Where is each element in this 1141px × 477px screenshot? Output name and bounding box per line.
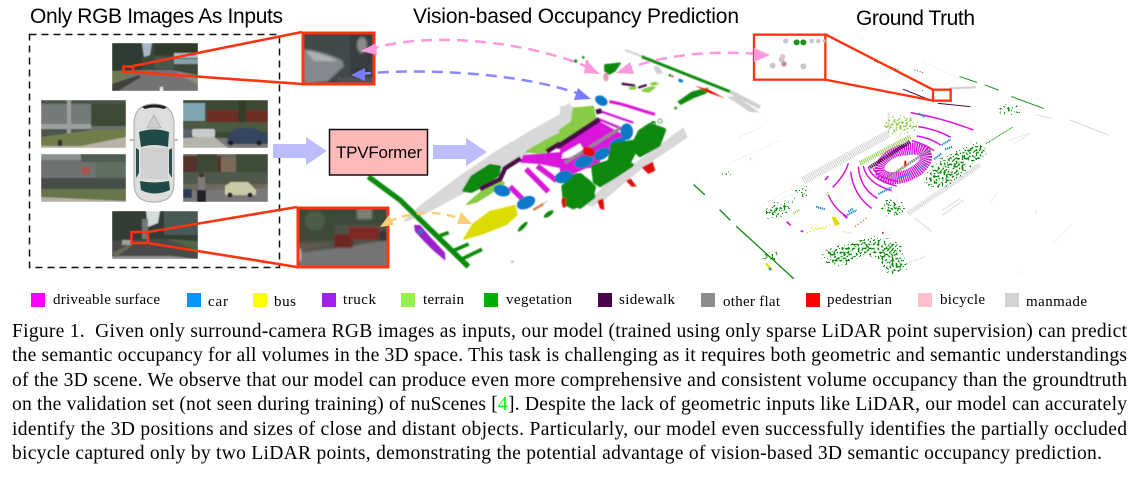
legend: pedestrian: pedestrian (827, 292, 892, 308)
legend: truck (322, 292, 376, 308)
legend: bus: bus (274, 294, 296, 310)
chart: ground truth LiDAR scene (694, 34, 1108, 279)
truck (414, 225, 445, 261)
cars far (553, 93, 633, 185)
vegetation near (517, 175, 594, 233)
caption (12, 321, 1128, 464)
bus (464, 206, 517, 239)
driveable surface far (560, 102, 655, 174)
legend: bus (253, 293, 296, 310)
caption: the semantic occupancy for all volumes in the 3D space. This task is challenging as it requires both geometric and semantic understandings (12, 345, 1127, 366)
other flat points (888, 148, 932, 177)
pedestrian and misc points (769, 161, 906, 270)
vegetation far blocks (565, 121, 664, 207)
outer ground truth points (694, 34, 1108, 278)
legend: car: car (208, 294, 228, 310)
legend: vegetation: vegetation (506, 292, 572, 308)
zoom connector top (124, 32, 302, 84)
vegetation left (463, 165, 500, 192)
car points (816, 113, 953, 215)
legend: driveable surface: driveable surface (53, 292, 160, 308)
legend: bicycle (918, 292, 985, 308)
arrow: TPVFormer to prediction (433, 138, 487, 166)
caption: identify the 3D positions and sizes of close and distant objects. Particularly, our model even successfully identifies the partially occluded (12, 419, 1127, 440)
driveable surface points (787, 113, 973, 232)
caption: bicycle captured only by two LiDAR points, demonstrating the potential advantage of vision-based 3D semantic occupancy prediction. (12, 443, 1102, 464)
cars near (418, 152, 596, 234)
caption: Figure 1. Given only surround-camera RGB images as inputs, our model (trained using only sparse LiDAR point supervision) can predict (12, 321, 1128, 342)
camera image: rear (112, 211, 198, 259)
terrain near (467, 107, 597, 204)
arrow: pink left pair (361, 40, 600, 74)
arrow: blue pair (351, 68, 591, 100)
dashed input frame (30, 34, 280, 268)
arrow: orange pair (380, 212, 472, 227)
legend: other flat (701, 293, 781, 310)
sidewalk near (480, 143, 560, 189)
camera image: front left (41, 100, 126, 148)
central ground truth points (760, 112, 980, 270)
green barrier near (368, 177, 482, 267)
zoom frame top (303, 33, 374, 84)
other flat far (565, 128, 620, 163)
zoom inset (754, 35, 826, 80)
other flat near (565, 142, 600, 162)
arrow: pink right pair (616, 53, 760, 74)
panel: camera inputs (30, 34, 280, 268)
far terrain (628, 82, 659, 93)
heading: Vision-based Occupancy Prediction: Vision-based Occupancy Prediction (413, 5, 739, 28)
zoom connector bottom (132, 207, 297, 267)
left manmade wall (405, 104, 574, 221)
debris (511, 260, 514, 263)
far sidewalk and box (825, 34, 970, 107)
caption: of the 3D scene. We observe that our model can produce even more comprehensive and consistent volume occupancy than the groundtruth (12, 370, 1127, 391)
camera image: front (112, 43, 198, 91)
manmade points (760, 112, 980, 263)
hole far (562, 143, 584, 159)
callout: rear camera zoom (132, 207, 388, 267)
far sidewalk (622, 84, 647, 88)
terrain points (793, 137, 911, 213)
sidewalk far (557, 111, 602, 147)
near half of prediction (368, 104, 600, 267)
zoomed crop: bus on road (300, 210, 386, 266)
terrain point cluster (877, 112, 923, 138)
sidewalk points (870, 142, 910, 167)
pedestrian bollard (561, 197, 566, 208)
block: TPVFormer: TPVFormer (336, 143, 422, 162)
arrow: pink tip over ground truth inset (754, 48, 770, 62)
pedestrians far (562, 162, 655, 210)
icon: ego car top view (130, 104, 178, 202)
far wall stub (560, 105, 572, 130)
block: TPVFormer (330, 130, 428, 175)
chart: predicted occupancy 3D scene (368, 50, 760, 267)
zoomed crop: passing car (304, 34, 372, 82)
legend: terrain (401, 292, 464, 308)
far blue car (678, 78, 684, 83)
legend: bicycle: bicycle (940, 292, 985, 308)
legend (31, 292, 1087, 310)
legend: other flat: other flat (723, 294, 781, 310)
pedestrian centre (581, 145, 596, 158)
far green barrier (642, 57, 730, 92)
vegetation point clusters (713, 69, 1028, 279)
hole in driveable points (882, 152, 911, 174)
camera image: rear left (41, 154, 126, 202)
far vegetation (574, 56, 708, 109)
arrow: images to TPVFormer (273, 137, 327, 165)
legend: sidewalk: sidewalk (619, 292, 676, 308)
camera image: front right (183, 100, 268, 148)
heading: Ground Truth: Ground Truth (856, 7, 975, 30)
legend: manmade: manmade (1026, 294, 1087, 310)
outer manmade points (730, 62, 1108, 273)
bus points (766, 217, 840, 270)
far half of prediction (553, 50, 760, 210)
legend: terrain: terrain (423, 292, 464, 308)
far terrain block (560, 107, 595, 141)
right manmade wall (587, 128, 687, 206)
pedestrian near (581, 145, 596, 158)
caption: on the validation set (not seen during training) of nuScenes [4]. Despite the lack of geometric inputs like LiDAR, our model can accurately (12, 394, 1127, 415)
legend: manmade (1005, 293, 1087, 310)
cone tip (543, 201, 547, 204)
holes (563, 143, 583, 157)
zoom frame bottom (298, 208, 388, 267)
cone (533, 204, 543, 210)
heading: Only RGB Images As Inputs: Only RGB Images As Inputs (30, 5, 283, 28)
far reds (586, 61, 725, 98)
far manmade strip (625, 50, 760, 113)
outer vegetation lines (694, 62, 1043, 278)
camera image: rear right (183, 154, 268, 202)
callout: front camera zoom (124, 32, 374, 84)
bicycle (603, 73, 609, 81)
legend: car (187, 293, 228, 310)
legend: truck: truck (343, 292, 376, 308)
driveable surface near (510, 125, 600, 199)
